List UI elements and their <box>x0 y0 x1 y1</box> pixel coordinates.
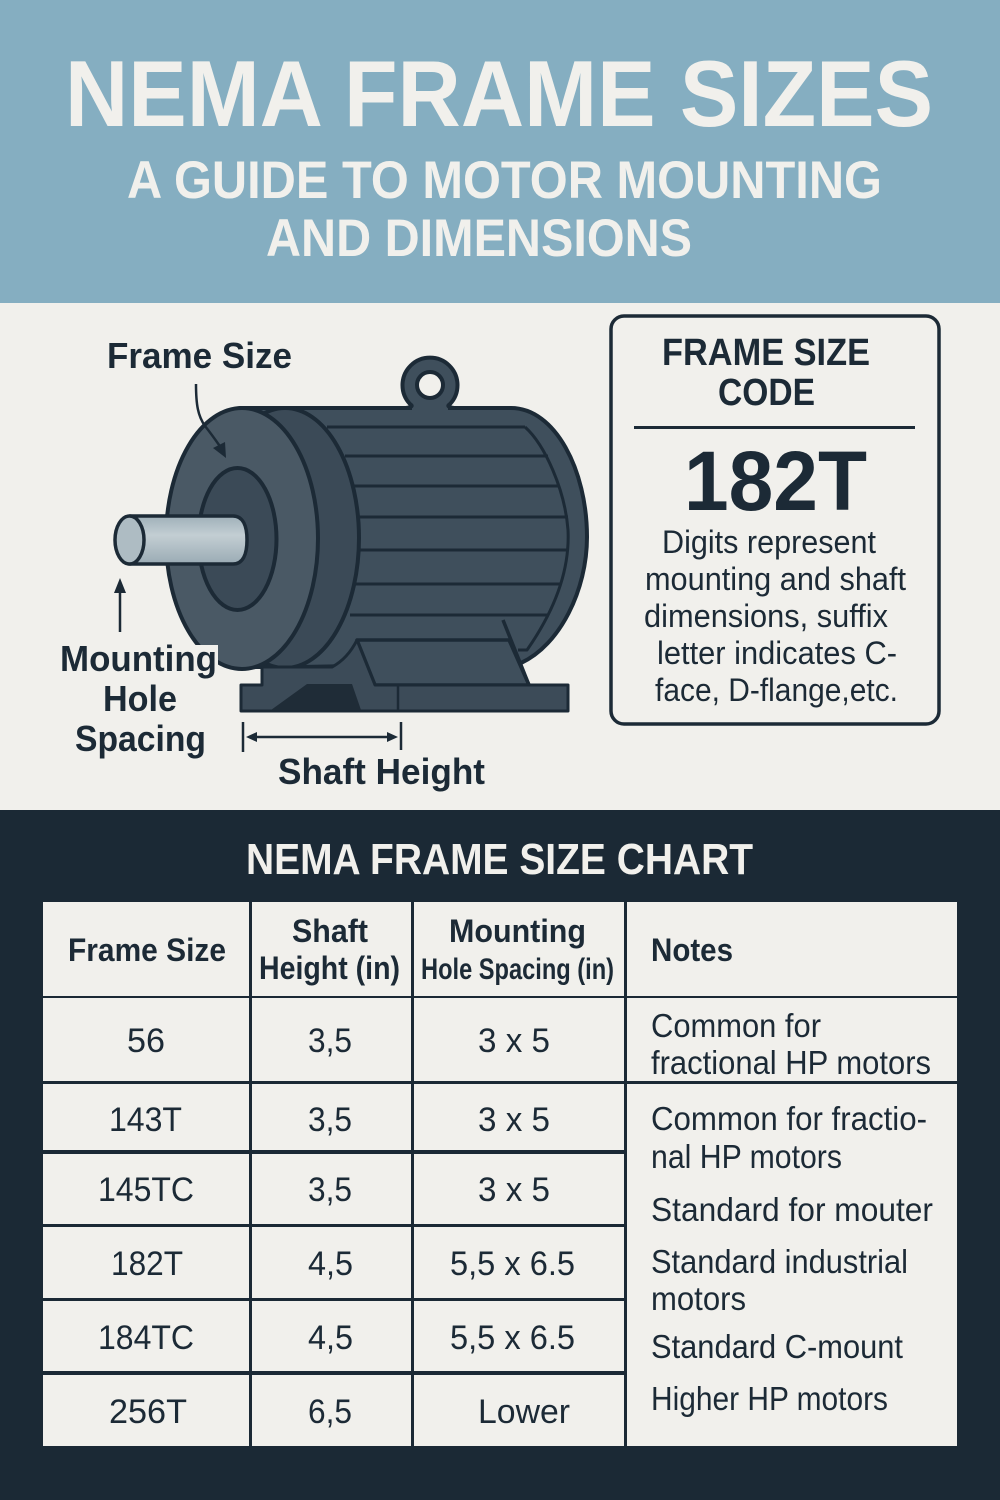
table row: 256T: 6,5 <box>308 1393 352 1431</box>
notes column: nal HP motors <box>651 1138 842 1175</box>
label: frame size: Frame Size <box>107 335 292 376</box>
panel: frame size chart <box>0 810 1000 1500</box>
table header <box>68 913 733 986</box>
table row: 184TC <box>98 1319 575 1357</box>
table row: 143T: 3,5 <box>308 1101 352 1139</box>
table row: 184TC: 184TC <box>98 1319 194 1357</box>
code description: face, D-flange,etc. <box>655 672 898 708</box>
table row: 182T: 182T <box>111 1245 183 1283</box>
table row: 256T: Lower <box>478 1393 570 1431</box>
table row: 256T: 256T <box>109 1393 187 1431</box>
motor mount <box>357 640 529 685</box>
front face <box>166 408 318 669</box>
table header: Shaft <box>292 913 368 949</box>
notes column: Standard C-mount <box>651 1328 903 1365</box>
subtitle: A GUIDE TO MOTOR MOUNTING <box>127 151 882 210</box>
table header: Height (in) <box>259 950 400 986</box>
notes column: fractional HP motors <box>651 1044 931 1081</box>
table row: 143T: 3 x 5 <box>478 1101 550 1139</box>
end bell band <box>211 408 359 668</box>
foot base <box>241 640 568 711</box>
panel: frame size code <box>611 316 939 724</box>
table row: 56: 3,5 <box>308 1022 352 1060</box>
label: frame size <box>107 335 292 458</box>
notes column <box>651 1007 933 1417</box>
table row: 184TC: 5,5 x 6.5 <box>450 1319 575 1357</box>
table row: 145TC: 3 x 5 <box>478 1171 550 1209</box>
arrow: mounting hole spacing <box>114 578 126 632</box>
code description: mounting and shaft <box>645 561 906 597</box>
notes column: Common for <box>651 1007 821 1044</box>
shaft <box>130 516 247 564</box>
cooling fins <box>327 427 568 650</box>
label: shaft height: Shaft Height <box>278 751 485 792</box>
table row: 182T: 4,5 <box>308 1245 353 1283</box>
table row: 256T <box>109 1393 570 1431</box>
panel heading <box>662 332 870 414</box>
table row: 56 <box>127 1022 550 1060</box>
code description <box>644 524 906 708</box>
table header: Notes <box>651 932 733 968</box>
notes column: Standard for mouter <box>651 1191 933 1228</box>
table row: 145TC <box>98 1171 550 1209</box>
arrow: frame size <box>196 384 226 458</box>
table header: Mounting <box>449 913 586 949</box>
notes column: Standard industrial <box>651 1243 908 1280</box>
table row: 56: 3 x 5 <box>478 1022 550 1060</box>
table row: 182T: 5,5 x 6.5 <box>450 1245 575 1283</box>
lifting eye <box>402 358 458 411</box>
table row: 182T <box>111 1245 575 1283</box>
label: mounting hole spacing: Mounting <box>60 638 217 679</box>
title: NEMA FRAME SIZES <box>65 41 933 146</box>
chart heading: NEMA FRAME SIZE CHART <box>246 835 753 884</box>
table row: 145TC: 145TC <box>98 1171 194 1209</box>
panel heading: FRAME SIZE <box>662 332 870 374</box>
motor body <box>240 408 587 667</box>
table row: 143T <box>109 1101 550 1139</box>
notes column: Higher HP motors <box>651 1380 888 1417</box>
label: mounting hole spacing <box>60 638 218 759</box>
code description: Digits represent <box>662 524 876 560</box>
dimension: shaft height <box>243 722 485 792</box>
table row: 56: 56 <box>127 1022 165 1060</box>
notes column: motors <box>651 1280 746 1317</box>
code description: dimensions, suffix <box>644 598 888 634</box>
table row: 184TC: 4,5 <box>308 1319 353 1357</box>
panel heading: CODE <box>718 372 815 414</box>
label: mounting hole spacing: Spacing <box>75 718 206 759</box>
table header: Hole Spacing (in) <box>421 953 614 986</box>
notes column: Common for fractio- <box>651 1100 927 1137</box>
table cells <box>43 902 957 1446</box>
header banner <box>0 0 1000 303</box>
motor illustration <box>115 358 587 711</box>
code example: 182T <box>684 434 867 528</box>
table header: Frame Size <box>68 932 226 968</box>
table row: 145TC: 3,5 <box>308 1171 352 1209</box>
label: mounting hole spacing: Hole <box>103 678 177 719</box>
subtitle <box>127 151 882 268</box>
table row: 143T: 143T <box>109 1101 182 1139</box>
code description: letter indicates C- <box>657 635 897 671</box>
subtitle: AND DIMENSIONS <box>266 209 692 268</box>
